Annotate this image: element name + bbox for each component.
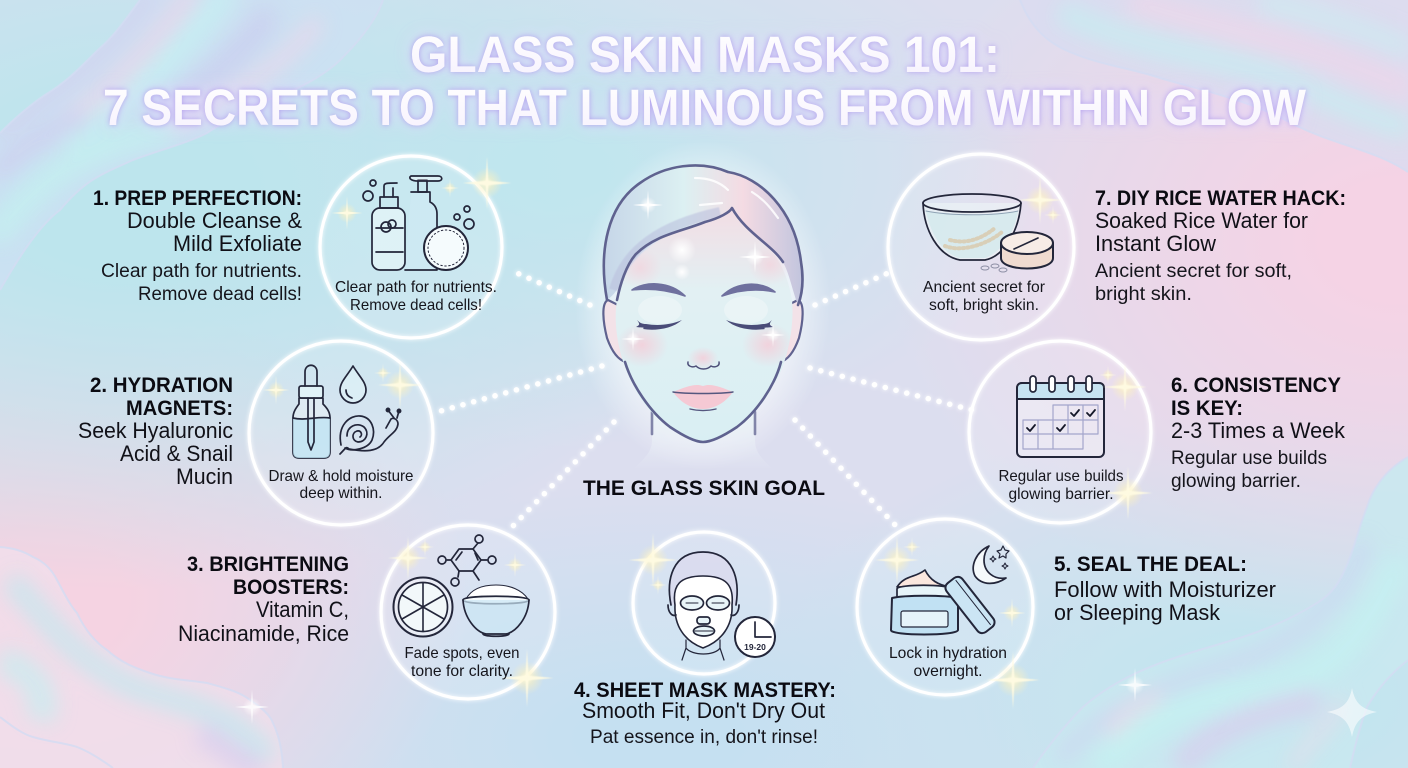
decorative bubble: top left <box>0 0 390 295</box>
decorative bubble: top right <box>1015 0 1408 175</box>
panel: step 3 circle: tone for clarity. <box>411 663 513 680</box>
icon: calendar <box>1017 376 1104 457</box>
sparkles on face <box>633 190 663 220</box>
title <box>103 26 1307 136</box>
text block: step 2 <box>78 374 233 489</box>
connector lines <box>437 270 972 535</box>
text block: step 2: 2. HYDRATION <box>90 374 233 397</box>
caption: Fade spots, even <box>404 645 520 662</box>
panel: step 5 circle: overnight. <box>914 663 982 680</box>
text block: step 6: 2-3 Times a Week <box>1171 418 1346 443</box>
text block: step 1: Clear path for nutrients. <box>101 261 302 282</box>
text block: step 4 <box>574 679 836 748</box>
icon: dropper, droplet and snail <box>293 365 401 458</box>
text block: step 6: 6. CONSISTENCY <box>1171 374 1341 397</box>
panel: step 6 circle <box>969 341 1152 523</box>
decorative bubble: bottom left <box>0 540 290 768</box>
text block: step 6: Regular use builds <box>1171 448 1327 469</box>
text block: step 5: 5. SEAL THE DEAL: <box>1054 553 1247 576</box>
title: 7 SECRETS TO THAT LUMINOUS FROM WITHIN GLOW <box>103 79 1307 136</box>
text block: step 1: Double Cleanse & <box>127 208 302 233</box>
panel: step 2 circle <box>249 341 433 525</box>
panel: step 4 circle <box>629 532 775 674</box>
text block: step 6 <box>1171 374 1346 492</box>
text block: step 3 <box>178 553 349 646</box>
text block: step 4: Smooth Fit, Don't Dry Out <box>582 698 825 723</box>
text block: step 5: or Sleeping Mask <box>1054 600 1221 625</box>
eyebrows <box>632 284 685 296</box>
text block: step 5: Follow with Moisturizer <box>1054 577 1276 602</box>
sparkles <box>875 536 1039 709</box>
text block: step 2: Mucin <box>176 464 233 489</box>
caption: Lock in hydration <box>889 645 1007 662</box>
icon: watermark star <box>1327 688 1377 737</box>
text block: step 3: Niacinamide, Rice <box>178 621 349 646</box>
face shape <box>616 208 793 442</box>
text block: step 7: Ancient secret for soft, <box>1095 261 1292 282</box>
text block: step 3: 3. BRIGHTENING <box>187 553 349 576</box>
hair <box>604 165 802 305</box>
panel: step 3 circle <box>381 525 555 707</box>
caption: Draw & hold moisture <box>268 468 414 485</box>
caption: Regular use builds <box>998 468 1124 485</box>
text block: step 2: MAGNETS: <box>126 397 233 420</box>
sparkles <box>332 157 511 230</box>
decorative bubble: bottom right <box>1030 455 1408 768</box>
icon: cream jar and moon <box>891 546 1009 636</box>
sparkles <box>1018 176 1062 225</box>
text block: step 7: bright skin. <box>1095 284 1192 305</box>
ears <box>603 300 628 362</box>
text block: step 1: 1. PREP PERFECTION: <box>93 187 302 210</box>
text block: step 3: Vitamin C, <box>256 597 349 622</box>
text block: step 1: Mild Exfoliate <box>173 231 302 256</box>
lips <box>673 385 733 409</box>
panel: step 5 circle <box>857 519 1039 709</box>
sparkles <box>629 534 677 595</box>
sparkles <box>263 361 422 409</box>
timer label: 19-20 <box>744 642 766 652</box>
eyes <box>636 320 682 330</box>
sparkles <box>1099 363 1152 519</box>
text block: step 1 <box>93 187 302 305</box>
label: the glass skin goal: THE GLASS SKIN GOAL <box>583 477 825 500</box>
text block: step 7: 7. DIY RICE WATER HACK: <box>1095 187 1346 210</box>
text block: step 3: BOOSTERS: <box>233 576 349 599</box>
text block: step 7: Instant Glow <box>1095 231 1216 256</box>
icon: rice water bowl and tablet <box>923 194 1053 272</box>
icon: sheet mask and timer <box>668 552 775 660</box>
icon: cleanser bottles and cotton pad <box>363 176 474 270</box>
text block: step 4: 4. SHEET MASK MASTERY: <box>574 679 836 702</box>
panel: step 1 circle: Remove dead cells! <box>350 297 482 314</box>
text block: step 4: Pat essence in, don't rinse! <box>590 727 818 748</box>
panel: step 7 circle <box>888 154 1074 340</box>
nose <box>688 362 719 369</box>
icon: citrus, molecule and rice bowl <box>394 535 529 636</box>
text block: step 2: Seek Hyaluronic <box>78 418 233 443</box>
text block: step 6: IS KEY: <box>1171 397 1243 420</box>
panel: step 2 circle: deep within. <box>300 485 382 502</box>
panel: step 7 circle: soft, bright skin. <box>929 297 1039 314</box>
text block: step 7 <box>1095 187 1346 305</box>
caption: Ancient secret for <box>923 279 1046 296</box>
text block: step 5 <box>1054 553 1276 625</box>
title: GLASS SKIN MASKS 101: <box>410 26 1000 83</box>
text block: step 7: Soaked Rice Water for <box>1095 208 1308 233</box>
panel: step 1 circle <box>320 156 511 338</box>
caption: Clear path for nutrients. <box>335 279 497 296</box>
sparkles <box>388 536 553 707</box>
panel: step 6 circle: glowing barrier. <box>1008 486 1114 503</box>
text block: step 2: Acid & Snail <box>120 441 233 466</box>
illustration: glass skin face <box>575 140 831 470</box>
text block: step 6: glowing barrier. <box>1171 471 1301 492</box>
neck <box>632 405 774 470</box>
text block: step 1: Remove dead cells! <box>138 284 302 305</box>
